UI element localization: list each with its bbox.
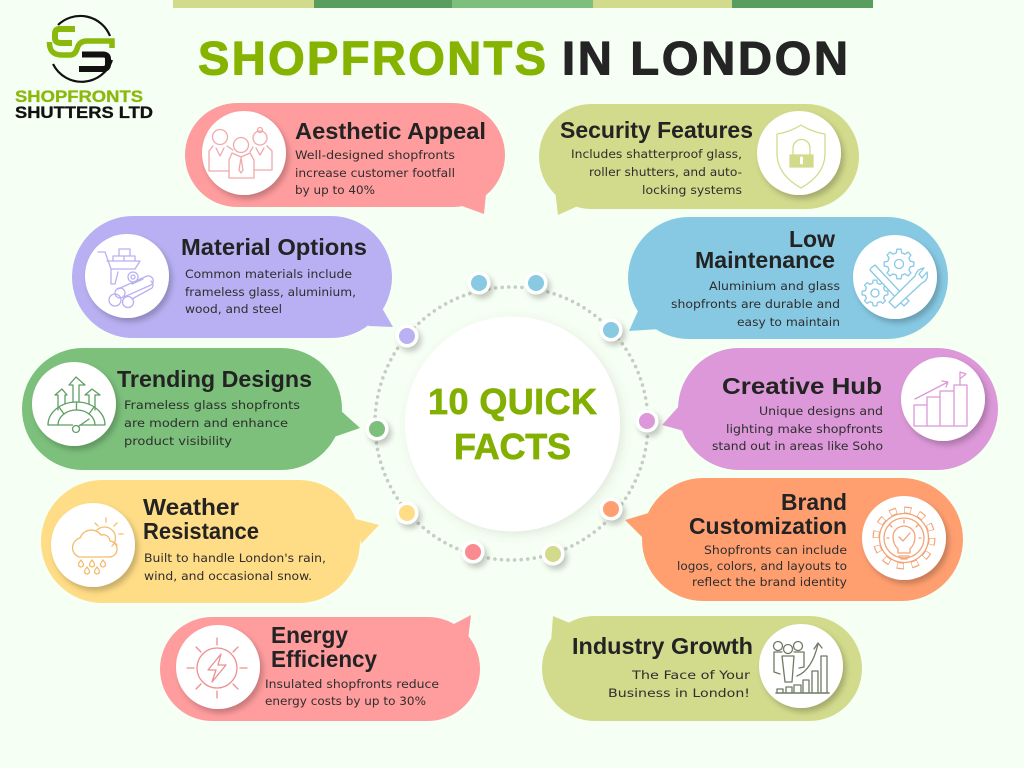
body text	[124, 398, 300, 448]
heading: Security Features	[560, 117, 753, 143]
panel: trending designs	[22, 348, 360, 470]
body text: Aluminium and glass	[709, 279, 840, 293]
body text: stand out in areas like Soho	[712, 439, 883, 453]
icon: rising bars	[914, 372, 967, 426]
panel: brand customization	[625, 478, 963, 601]
heading: Maintenance	[695, 247, 835, 273]
logo wordmark: SHUTTERS LTD	[15, 104, 153, 122]
body text: roller shutters, and auto-	[589, 165, 742, 179]
body text	[185, 267, 356, 316]
heading: Customization	[689, 513, 847, 539]
heading: Material Options	[181, 234, 367, 260]
body text	[712, 404, 883, 453]
heading: Resistance	[143, 518, 259, 544]
body text: Insulated shopfronts reduce	[265, 677, 439, 691]
title: IN LONDON	[562, 32, 848, 84]
body text: frameless glass, aluminium,	[185, 285, 356, 299]
panel: security features	[539, 104, 859, 215]
body text: are modern and enhance	[124, 416, 288, 430]
panel: material options	[72, 216, 393, 338]
icon: wheelbarrow and logs	[98, 249, 153, 308]
panel: weather resistance	[41, 480, 379, 603]
centre circle: 10 quick facts	[405, 316, 620, 532]
icon: people	[209, 128, 272, 178]
title: SHOPFRONTS	[198, 32, 546, 84]
heading: Low	[789, 226, 835, 252]
logo wordmark	[15, 87, 153, 122]
body text: locking systems	[642, 183, 742, 197]
heading	[143, 494, 259, 544]
body text: logos, colors, and layouts to	[677, 559, 847, 573]
icon: cloud sun rain	[73, 518, 123, 574]
body text: energy costs by up to 30%	[265, 694, 426, 708]
body text: Business in London!	[608, 686, 750, 700]
heading	[689, 489, 847, 539]
centre circle: 10 quick facts: FACTS	[454, 426, 571, 467]
body text	[671, 279, 840, 329]
body text: Unique designs and	[759, 404, 883, 418]
panel: low maintenance	[628, 217, 948, 339]
body text	[265, 677, 439, 708]
centre circle: 10 quick facts: 10 QUICK	[428, 381, 597, 422]
body text: increase customer footfall	[295, 166, 455, 180]
body text: The Face of Your	[631, 668, 750, 682]
icon: gears and tools	[862, 249, 927, 308]
heading	[695, 226, 835, 273]
body text	[677, 543, 847, 589]
icon: gear with lightbulb	[876, 510, 932, 566]
body text	[144, 551, 326, 583]
icon: energy bolt	[187, 638, 247, 698]
heading: Creative Hub	[722, 373, 882, 399]
heading: Energy	[271, 622, 348, 648]
body text: Includes shatterproof glass,	[571, 147, 742, 161]
body text: product visibility	[124, 434, 232, 448]
icon: people and growth chart	[774, 642, 829, 693]
heading: Aesthetic Appeal	[295, 118, 486, 144]
body text: Built to handle London's rain,	[144, 551, 326, 565]
body text	[571, 147, 742, 197]
body text: Common materials include	[185, 267, 352, 281]
panel: energy efficiency	[160, 615, 480, 721]
body text: Frameless glass shopfronts	[124, 398, 300, 412]
heading: Weather	[143, 494, 239, 520]
panel: aesthetic appeal	[185, 103, 505, 214]
dotted ring	[375, 287, 648, 560]
body text: shopfronts are durable and	[671, 297, 840, 311]
body text: lighting make shopfronts	[726, 422, 883, 436]
ring markers	[366, 272, 658, 566]
body text	[295, 148, 455, 197]
body text: Shopfronts can include	[704, 543, 847, 557]
top colour bar	[173, 0, 873, 8]
panel: creative hub	[662, 348, 998, 470]
heading: Trending Designs	[117, 366, 312, 392]
logo	[15, 16, 153, 122]
heading: Brand	[781, 489, 847, 515]
body text: wood, and steel	[185, 302, 282, 316]
title	[198, 32, 848, 84]
body text: easy to maintain	[737, 315, 840, 329]
heading: Efficiency	[271, 646, 377, 672]
body text: by up to 40%	[295, 183, 375, 197]
body text	[608, 668, 750, 700]
body text: reflect the brand identity	[692, 575, 847, 589]
icon: shield lock	[777, 125, 825, 188]
icon: gauge with arrows	[48, 377, 105, 432]
heading	[271, 622, 377, 672]
heading: Industry Growth	[572, 633, 753, 659]
logo wordmark: SHOPFRONTS	[15, 87, 143, 106]
body text: wind, and occasional snow.	[144, 569, 312, 583]
panel: industry growth	[542, 616, 862, 721]
body text: Well-designed shopfronts	[295, 148, 455, 162]
